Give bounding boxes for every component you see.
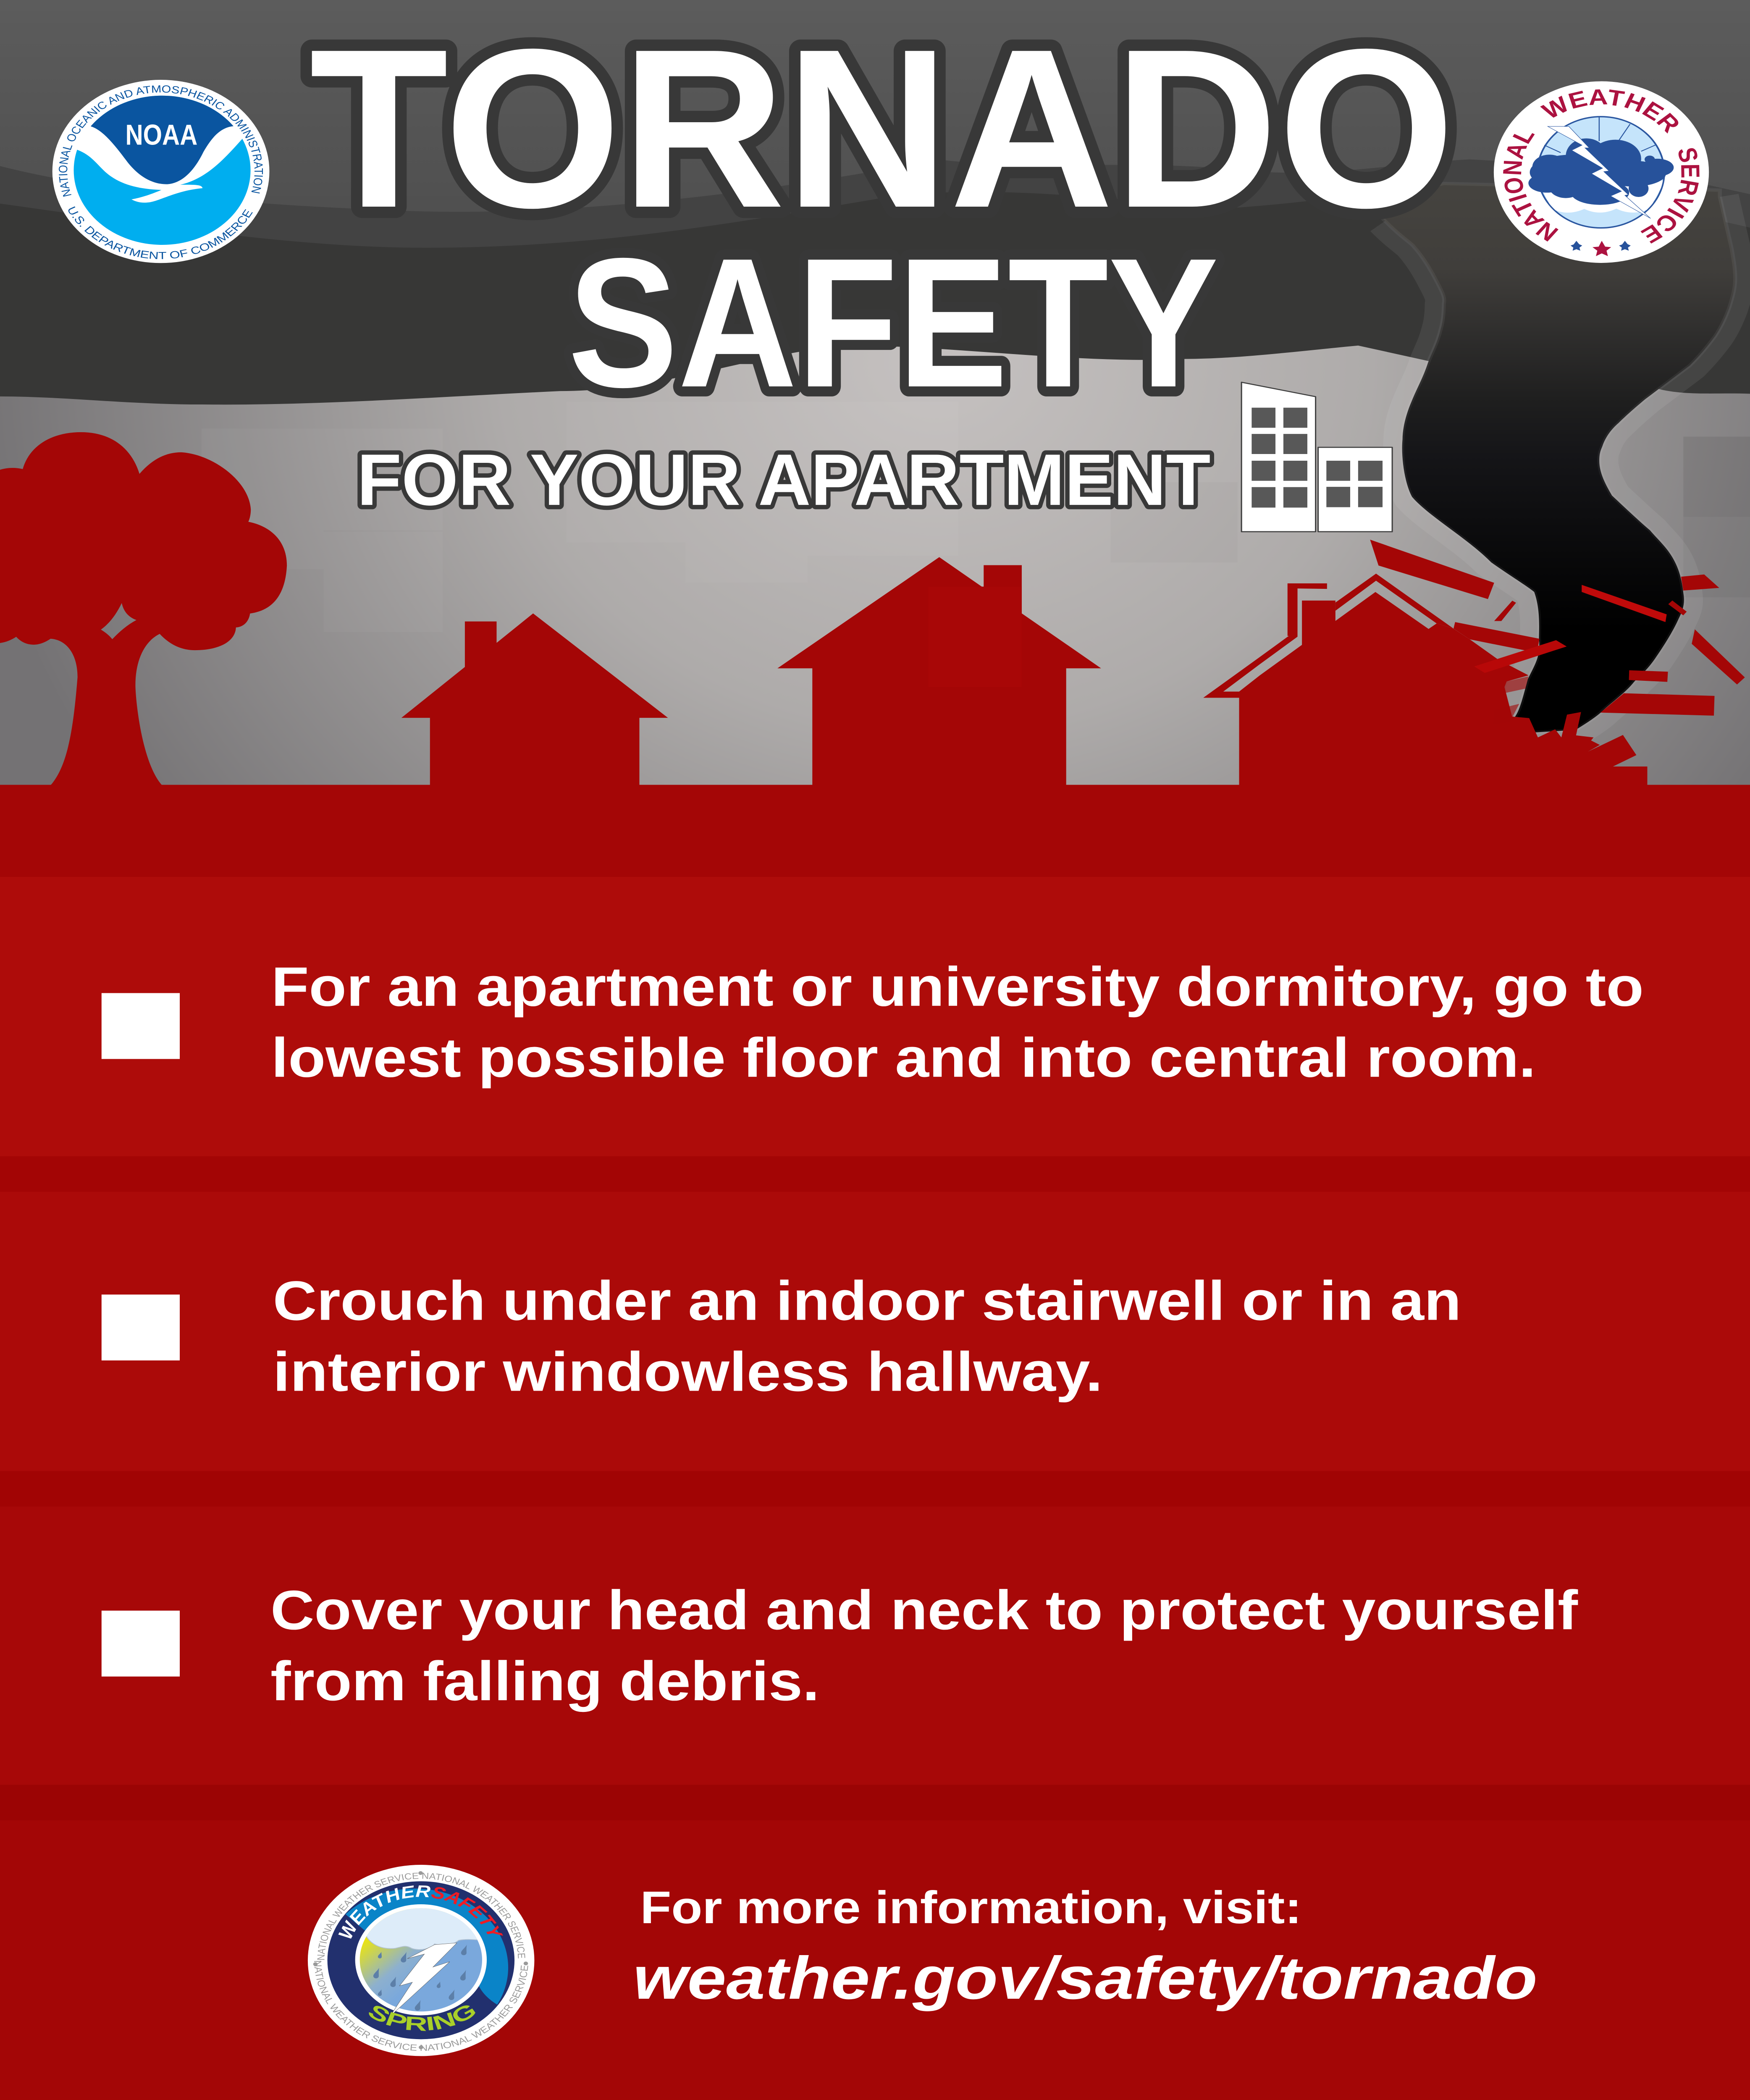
tip 1 text: lowest possible floor and into central room. [271,1026,1536,1089]
checkbox 2 [102,1294,180,1360]
panel 2 [0,1192,1750,1507]
checkbox 3 [102,1611,180,1677]
icon: tree silhouette [0,432,287,788]
tip 3 text: from falling debris. [270,1650,819,1712]
tip 2 text: interior windowless hallway. [273,1341,1103,1403]
house 2 [777,557,1101,790]
footer panel [0,1820,1750,2100]
subtitle: for your apartment: FOR YOUR APARTMENT [357,439,1211,521]
logo: National Weather Service: SERVICE [1636,145,1705,248]
tip 1 text: For an apartment or university dormitory, go to [271,956,1644,1018]
background tile pattern [202,402,1750,632]
footer: more information text: For more information, visit: [640,1882,1302,1933]
storm cloud: lower layer [0,186,1750,404]
tornado funnel [1364,184,1735,734]
logo: NOAA: NATIONAL OCEANIC AND ATMOSPHERIC ADMINISTRATION [56,83,265,198]
logo: National Weather Service: WEATHER [1537,85,1685,137]
background: stormy ground gradient [0,0,1750,803]
title: SAFETY: SAFETY [568,220,1218,425]
sky [0,0,1750,241]
logo: NOAA: U.S. DEPARTMENT OF COMMERCE [64,205,255,262]
title: TORNADO: TORNADO [310,2,1455,255]
logo: NOAA [52,80,269,263]
house 1 [401,613,668,790]
logo: National Weather Service: NATIONAL [1498,124,1564,246]
tornado halo [1385,197,1735,734]
checkbox 1 [102,993,180,1059]
ground band [0,785,1750,877]
logo: NOAA: NOAA [125,118,197,151]
logo: Weather Safety Spring: NATIONAL WEATHER SERVICE NATIONAL WEATHER SERVICE [312,1960,530,2053]
debris flying around tornado [1370,540,1745,787]
panel 1 [0,877,1750,1192]
logo: Weather Safety Spring: SPRING [363,1999,481,2035]
icon: apartment buildings [1241,382,1392,532]
logo: Weather Safety Spring [308,1865,534,2056]
tip 3 text: Cover your head and neck to protect yourself [270,1579,1578,1641]
footer: url: weather.gov/safety/tornado [633,1945,1537,2012]
tip 2 text: Crouch under an indoor stairwell or in an [273,1270,1461,1332]
panel 3 [0,1507,1750,1820]
logo: Weather Safety Spring: WEATHERSAFETY [334,1882,507,1942]
logo: Weather Safety Spring: NATIONAL WEATHER SERVICE NATIONAL WEATHER SERVICE [315,1871,527,1961]
house 3 being destroyed [1203,574,1531,790]
storm cloud: upper layer [0,159,1750,268]
logo: National Weather Service [1494,81,1709,263]
